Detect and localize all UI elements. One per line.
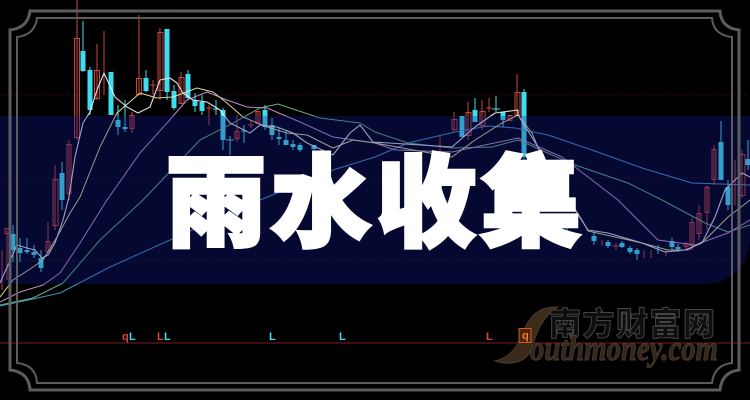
watermark: southmoney logo <box>495 306 718 368</box>
marker labels: L <box>129 331 136 343</box>
title band <box>0 116 750 284</box>
band tint over chart <box>0 116 750 284</box>
marker labels <box>122 331 493 343</box>
title: 雨水收集 <box>166 148 586 260</box>
marker labels: L <box>339 331 346 343</box>
marker labels: q <box>122 331 129 343</box>
red candles <box>2 0 745 290</box>
highlighted q marker <box>519 328 531 342</box>
MA line white <box>0 73 750 283</box>
baseline and signal labels <box>0 331 750 343</box>
watermark chinese name: 南方财富网 <box>549 306 717 342</box>
moving average lines <box>0 73 750 306</box>
marker labels: L <box>269 331 276 343</box>
MA line cream <box>0 88 750 297</box>
highlighted q marker: q <box>522 330 529 342</box>
logo swoosh <box>495 307 558 363</box>
candlestick chart <box>2 0 748 290</box>
MA line blue <box>0 126 750 306</box>
cyan candles <box>13 21 748 272</box>
MA line green <box>0 104 750 305</box>
marker labels: L <box>164 331 171 343</box>
MA line purple <box>0 92 750 302</box>
marker labels: L <box>157 331 164 343</box>
marker labels: L <box>486 331 493 343</box>
